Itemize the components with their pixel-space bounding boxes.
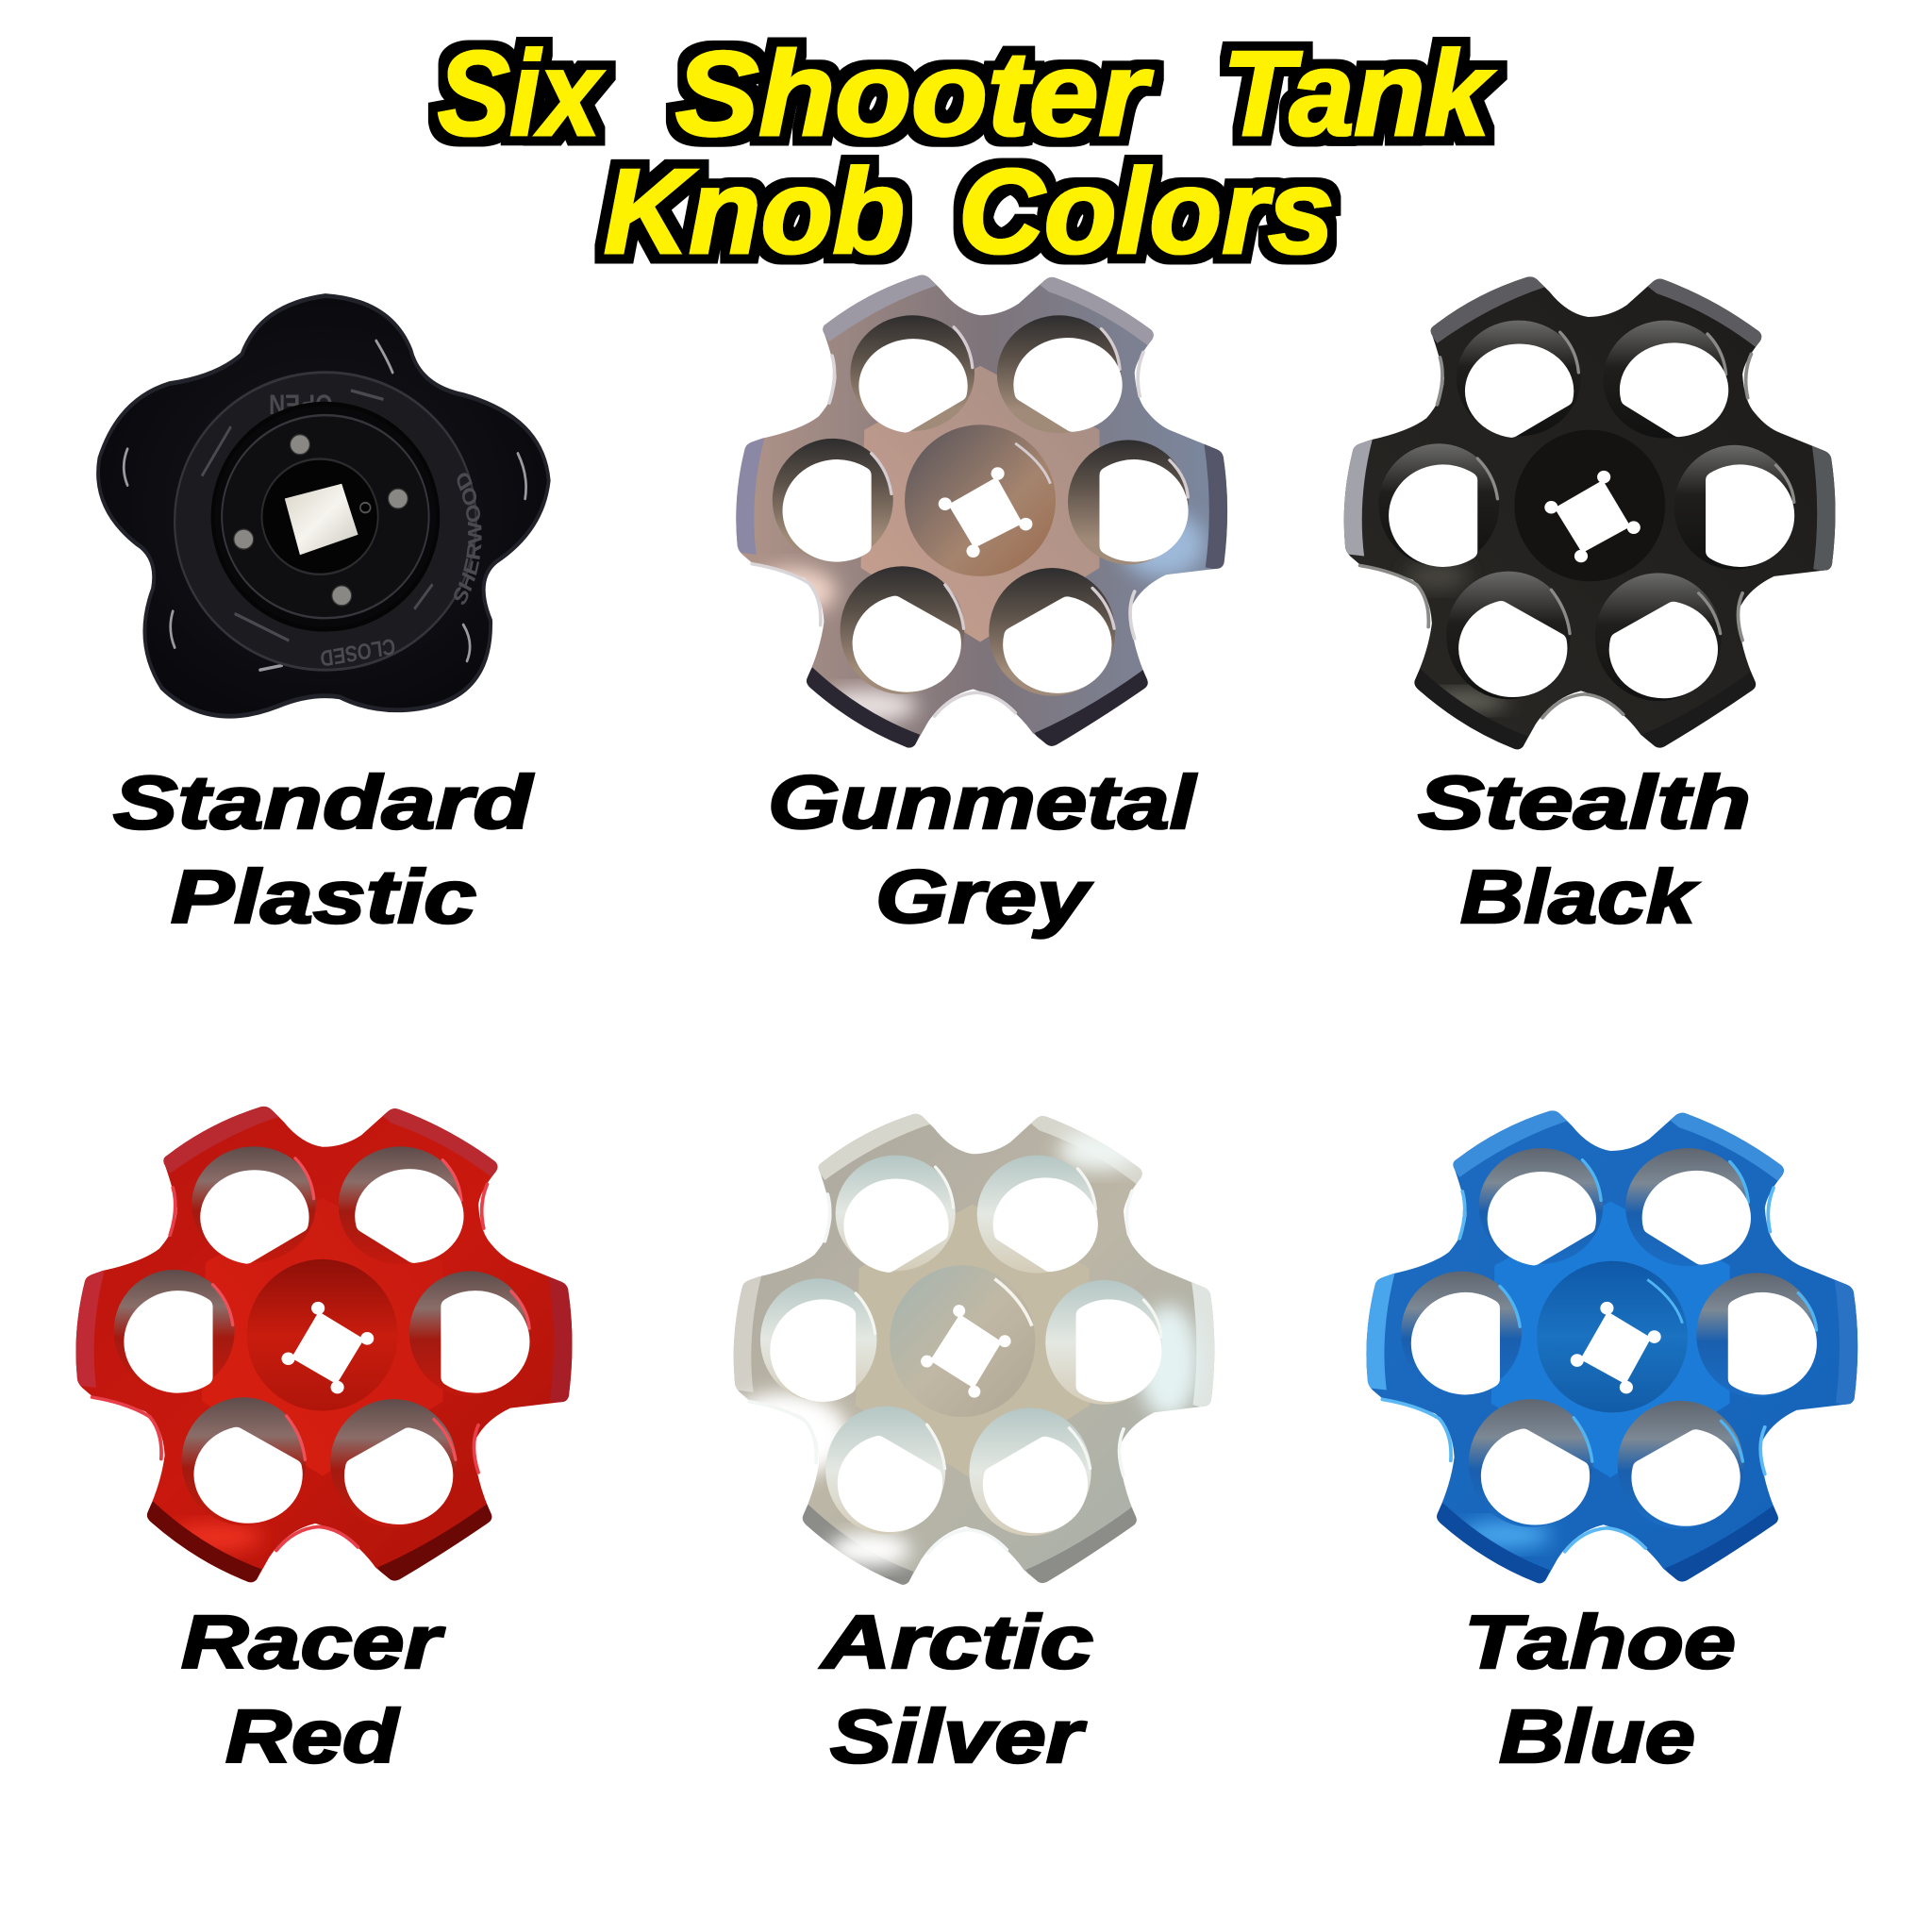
title: Knob	[604, 144, 905, 278]
label: Tahoe Blue: Tahoe	[1464, 1600, 1736, 1684]
label: Standard Plastic: Plastic	[171, 855, 476, 939]
icon: black plastic five-lobe knob: OPEN	[269, 389, 333, 420]
icon: tahoe blue knob	[1357, 1100, 1867, 1592]
label: Arctic Silver: Arctic	[819, 1600, 1093, 1684]
label: Gunmetal Grey	[768, 760, 1197, 939]
label: Gunmetal Grey: Grey	[875, 855, 1092, 939]
icon: black plastic five-lobe knob	[96, 293, 551, 719]
label: Arctic Silver	[819, 1600, 1093, 1778]
panel: Gunmetal Grey	[727, 265, 1237, 939]
panel: Tahoe Blue	[1357, 1100, 1867, 1778]
panel: Arctic Silver	[718, 1104, 1224, 1778]
panel: Stealth Black	[1336, 266, 1844, 939]
icon: arctic silver knob	[718, 1104, 1224, 1593]
label: Racer Red: Racer	[181, 1600, 445, 1684]
panel: Standard Plastic	[96, 293, 551, 939]
title: Six	[438, 26, 604, 160]
label: Standard Plastic	[113, 760, 535, 939]
label: Racer Red	[181, 1600, 445, 1778]
title: Tank	[1223, 26, 1494, 160]
label: Stealth Black: Black	[1460, 855, 1699, 939]
label: Stealth Black: Stealth	[1418, 760, 1751, 844]
label: Gunmetal Grey: Gunmetal	[768, 760, 1197, 844]
title	[438, 26, 1494, 278]
title: Colors	[958, 144, 1334, 278]
label: Arctic Silver: Silver	[830, 1694, 1087, 1778]
icon: gunmetal grey knob	[727, 265, 1237, 757]
icon: black plastic five-lobe knob: SHERWOOD	[454, 473, 481, 605]
icon: stealth black knob	[1336, 266, 1844, 758]
icon: racer red knob	[67, 1096, 581, 1591]
panel: Racer Red	[67, 1096, 581, 1778]
label: Tahoe Blue	[1464, 1600, 1736, 1778]
label: Stealth Black	[1418, 760, 1751, 939]
title: Shooter	[675, 26, 1154, 160]
icon: black plastic five-lobe knob: CLOSED	[319, 633, 397, 672]
label: Tahoe Blue: Blue	[1499, 1694, 1695, 1778]
label: Racer Red: Red	[225, 1694, 401, 1778]
label: Standard Plastic: Standard	[113, 760, 535, 844]
